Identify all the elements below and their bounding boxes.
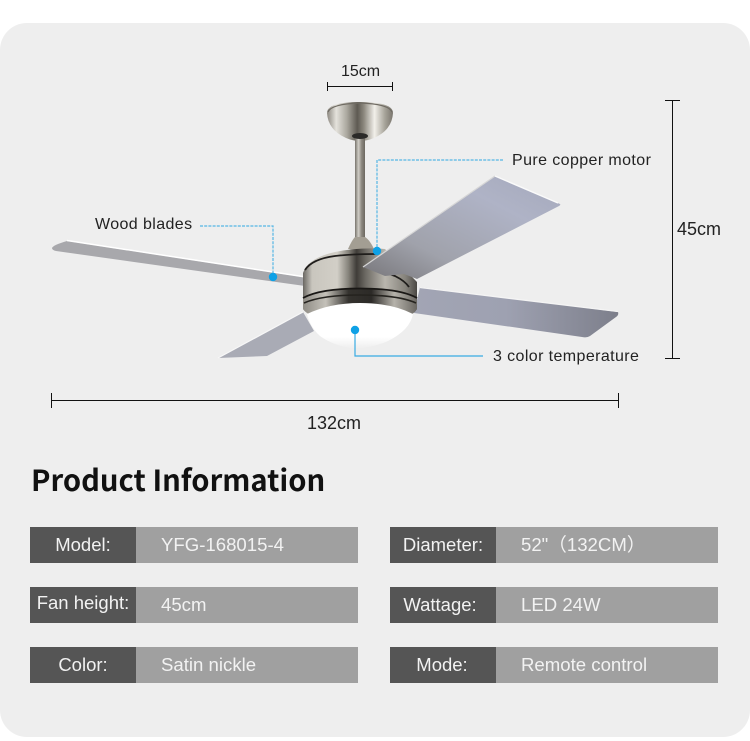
fan blade: right xyxy=(414,287,618,337)
spec row: wattage: LED 24W xyxy=(521,594,601,615)
light glass dome xyxy=(307,303,413,348)
spec row: wattage xyxy=(390,587,718,623)
spec row: model: Model: xyxy=(55,534,111,555)
spec row: fan height xyxy=(30,587,358,623)
motor housing xyxy=(303,237,417,322)
dimension: height 45cm xyxy=(665,100,721,358)
spec row: wattage: Wattage: xyxy=(403,594,477,615)
spec row: color: Color: xyxy=(58,654,108,675)
spec row: mode xyxy=(390,647,718,683)
fan blade: upper right xyxy=(363,176,560,279)
spec row: diameter xyxy=(390,527,718,563)
canopy collar xyxy=(352,133,368,139)
spec row: diameter: Diameter: xyxy=(403,534,483,555)
spec row: color xyxy=(30,647,358,683)
spec row: mode: Remote control xyxy=(521,654,647,675)
dimension: width 132cm xyxy=(52,393,618,433)
downrod xyxy=(355,134,365,240)
callout: wood blades xyxy=(95,216,277,281)
canopy xyxy=(327,102,393,141)
fan blade: lower left xyxy=(218,312,314,358)
spec row: model xyxy=(30,527,358,563)
callout: 3 color temperature xyxy=(351,326,639,365)
dimension: height 45cm: 45cm xyxy=(677,219,721,239)
spec row: mode: Mode: xyxy=(416,654,468,675)
dimension: canopy width 15cm xyxy=(328,63,392,91)
spec row: fan height: Fan height: xyxy=(37,592,129,613)
spec row: diameter: 52"（132CM） xyxy=(521,534,645,555)
spec row: fan height: 45cm xyxy=(161,594,206,615)
ceiling fan illustration xyxy=(52,102,618,358)
callout: pure copper motor: Pure copper motor xyxy=(512,152,652,169)
callout: pure copper motor xyxy=(373,152,652,255)
spec row: model: YFG-168015-4 xyxy=(161,534,284,555)
dimension: canopy width 15cm: 15cm xyxy=(341,63,380,80)
dimension: width 132cm: 132cm xyxy=(307,413,361,433)
fan blade: far left xyxy=(52,240,322,286)
title: Product Information xyxy=(31,458,325,500)
spec row: color: Satin nickle xyxy=(161,654,256,675)
callout: 3 color temperature: 3 color temperature xyxy=(493,348,639,365)
callout: wood blades: Wood blades xyxy=(95,216,193,233)
